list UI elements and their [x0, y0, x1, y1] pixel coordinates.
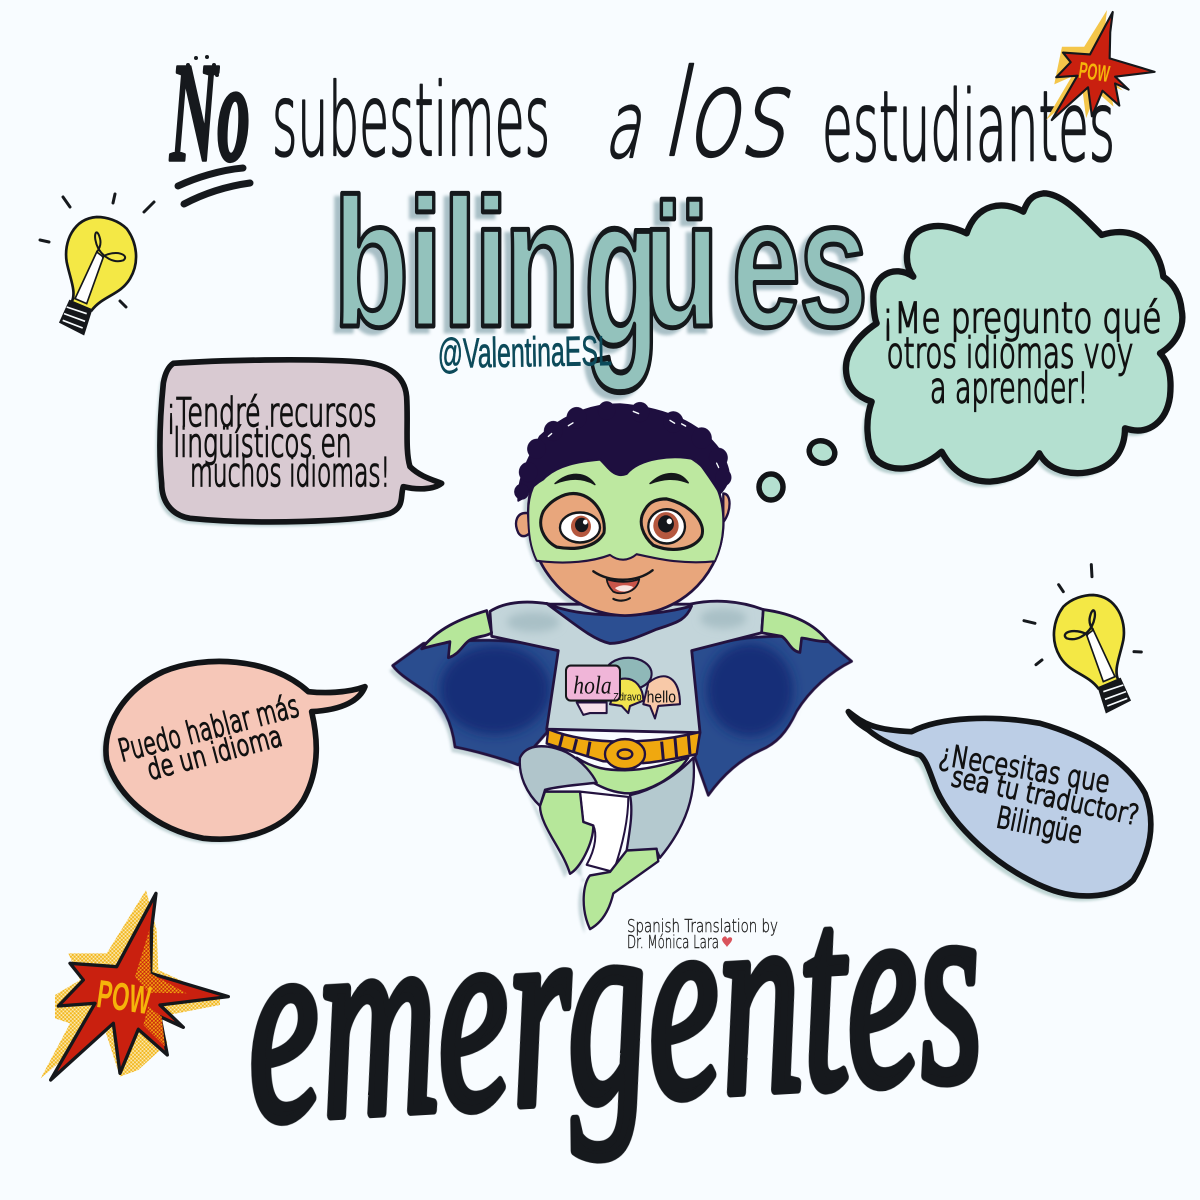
eyebrows — [555, 474, 688, 485]
superhero character — [389, 401, 852, 933]
heading shadow: bilin — [327, 166, 574, 371]
bubble text: ¡Tendré recursos — [166, 391, 377, 436]
bulb body — [61, 217, 136, 334]
left thigh — [520, 746, 597, 806]
belt — [547, 729, 700, 769]
collar — [547, 603, 692, 643]
pow burst: bottom left — [41, 890, 228, 1080]
bubble fill and outline — [848, 712, 1151, 896]
cape: left — [393, 640, 558, 765]
double underline — [178, 168, 250, 204]
star shape — [51, 893, 228, 1080]
bulb body — [1054, 595, 1129, 712]
right leg — [627, 758, 694, 858]
smile — [593, 570, 653, 601]
green mask — [528, 444, 723, 563]
hand: left — [422, 611, 492, 658]
word: los: los — [654, 43, 809, 184]
green underbelly — [577, 758, 688, 793]
ears — [516, 494, 730, 536]
bubble text: Puedo hablar más — [115, 689, 303, 769]
cloud text — [882, 294, 1162, 413]
bulb rays — [40, 194, 154, 307]
eye: right — [641, 499, 703, 549]
cloud text: a aprender! — [930, 364, 1088, 413]
cloud shadow — [841, 199, 1178, 487]
chest logo: speech bubbles: hello — [647, 689, 676, 707]
pow burst: top right: POW — [1077, 57, 1111, 87]
bubble fill and outline — [106, 661, 365, 839]
torso shading — [507, 608, 747, 632]
speech bubble: salmon — [102, 661, 365, 843]
chest logo: speech bubbles: Zdravo — [613, 691, 642, 704]
torso — [490, 601, 763, 733]
translation credit: Spanish Translation by — [627, 916, 778, 937]
bubble shadow — [102, 665, 312, 843]
author handle: @ValentinaESL — [437, 327, 612, 377]
bubble text: de un idioma — [143, 720, 286, 787]
thought cloud bubble — [841, 193, 1182, 487]
speech bubble: mauve rectangle — [156, 360, 442, 527]
translation credit — [627, 916, 778, 953]
title line: No subestimes a los estudiantes: subestimes — [272, 62, 550, 179]
bubble text: sea tu traductor? — [949, 762, 1141, 832]
bubble text: Bilingüe — [994, 800, 1085, 850]
word: a: a — [599, 72, 657, 179]
bubble fill and outline — [160, 360, 442, 522]
character shadow — [389, 416, 719, 933]
pow label: POW — [94, 972, 154, 1023]
heading letters: bilin — [333, 161, 580, 366]
left shin boot — [540, 792, 593, 874]
head — [528, 436, 723, 616]
cape shading: left — [440, 645, 550, 735]
heading shadow: ües — [637, 166, 862, 371]
bubble text: lingüísticos en — [173, 422, 352, 467]
heading: bilingües — [327, 148, 868, 398]
curly hair — [514, 401, 731, 501]
title line: No subestimes a los estudiantes: No — [169, 33, 250, 191]
thought dots — [759, 437, 838, 500]
speech bubble: blue — [848, 712, 1151, 901]
heading shadow — [327, 153, 862, 398]
hand: right — [762, 610, 828, 652]
chest logo: speech bubbles: hola — [573, 672, 612, 700]
bubble text — [937, 737, 1141, 850]
light bulb: top left — [40, 194, 154, 334]
translation credit: Dr. Mónica Lara — [627, 932, 719, 953]
sparkle dots over No — [186, 55, 219, 77]
right foot boot — [584, 849, 658, 929]
pow burst: top right — [1046, 10, 1155, 120]
bubble text — [115, 689, 303, 787]
bulb rays — [1024, 565, 1141, 665]
cape shading: right — [707, 643, 793, 736]
heading letters: g — [584, 148, 660, 393]
heading letters — [333, 148, 868, 393]
bubble text: muchos idiomas! — [190, 451, 390, 496]
title line: No subestimes a los estudiantes — [169, 33, 1115, 204]
heading shadow: g — [578, 153, 654, 398]
bubble shadow — [156, 365, 406, 527]
cloud fill and outline — [846, 193, 1182, 482]
white cape lining — [580, 792, 628, 872]
bubble text: ¿Necesitas que — [937, 737, 1112, 799]
light bulb: right — [1024, 565, 1141, 712]
halftone halo — [41, 890, 220, 1078]
bubble shadow — [907, 724, 1146, 901]
eye: left — [541, 494, 604, 548]
icon: heart — [722, 936, 732, 947]
inner halftone — [135, 930, 187, 1047]
bubble text — [166, 391, 390, 496]
hair curl highlights — [548, 411, 719, 467]
chest logo: speech bubbles — [566, 658, 680, 718]
heading letters: ües — [643, 161, 868, 366]
cape: right — [692, 636, 852, 795]
